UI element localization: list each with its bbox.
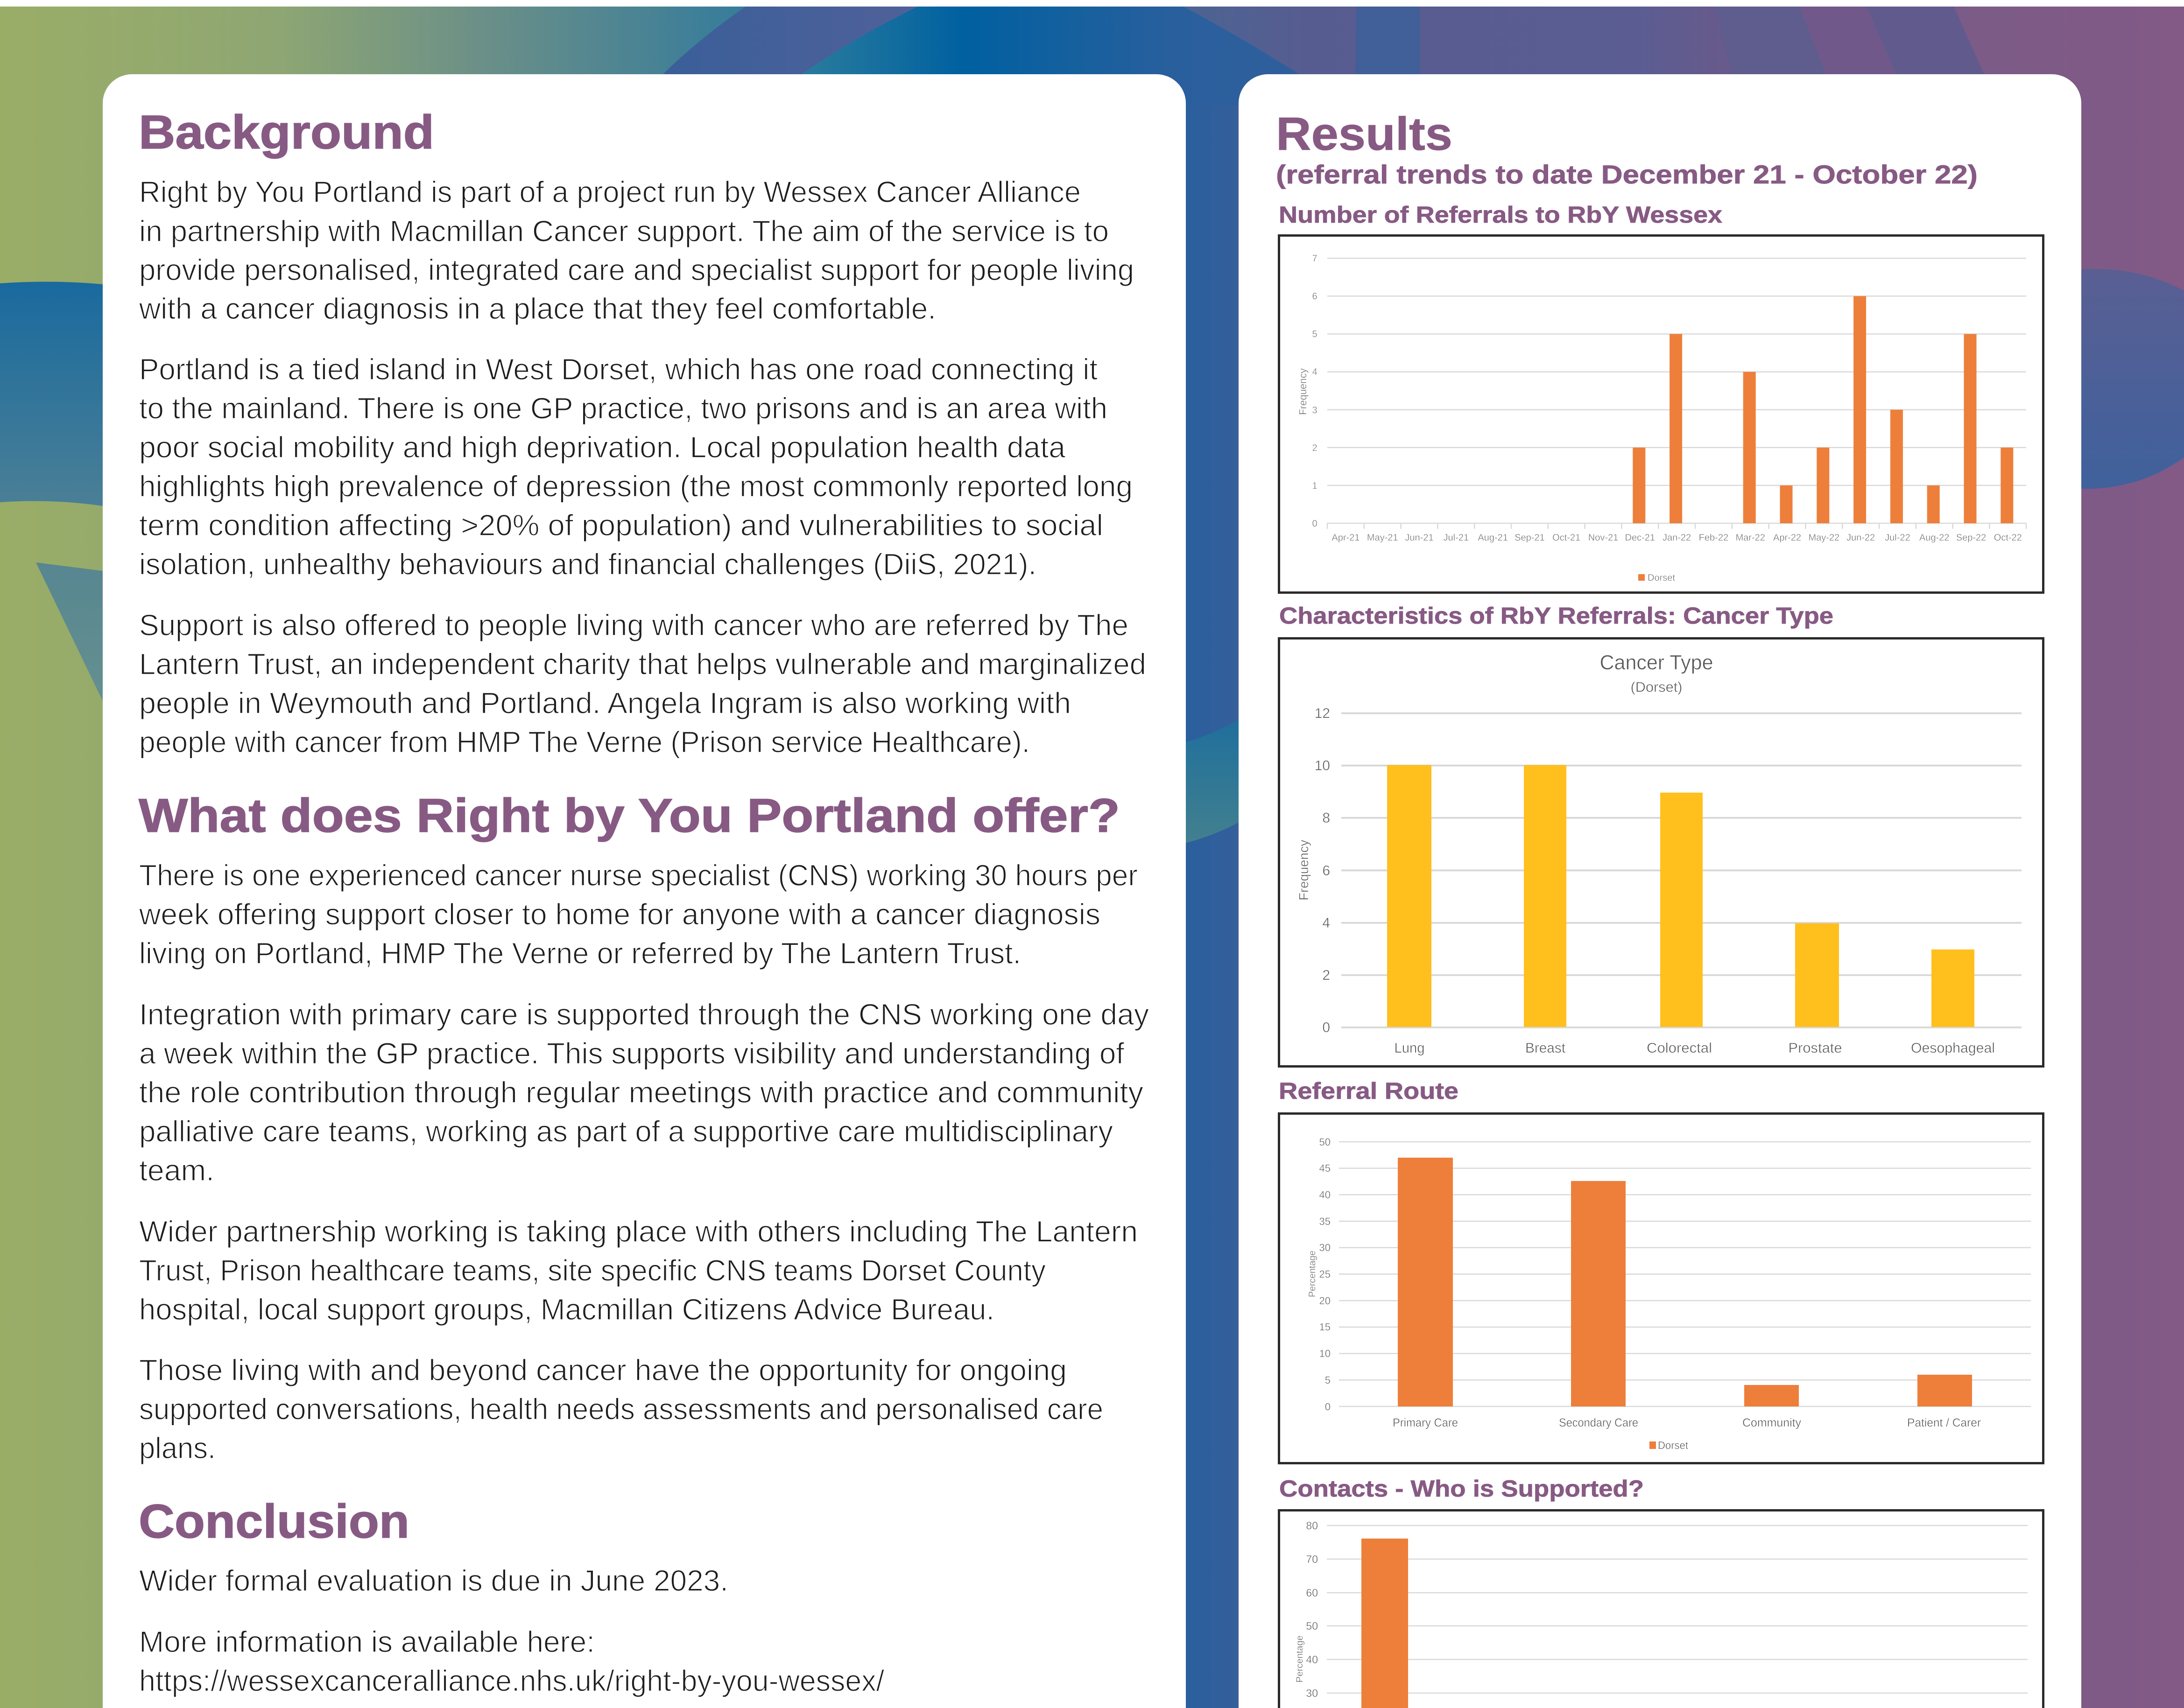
heading: Conclusion: Conclusion: [139, 1495, 409, 1548]
chart heading: contacts: Contacts - Who is Supported?: [1279, 1476, 1644, 1502]
bar chart: number of referrals: Aug-21: [1478, 533, 1508, 543]
bar chart: referral route: 35: [1319, 1216, 1331, 1227]
text block: background paragraph 2: term condition affecting >20% of population) and vulnerabilities to social: [139, 508, 1103, 542]
bar chart: cancer type: 0: [1322, 1020, 1330, 1035]
bar chart: contacts: 60: [1306, 1587, 1318, 1599]
text block: background paragraph 3: people with cancer from HMP The Verne (Prison service Healthcare).: [139, 725, 1030, 759]
text block: offer paragraph 2: Integration with primary care is supported through the CNS working one day: [139, 998, 1149, 1031]
text block: offer paragraph 2: the role contribution through regular meetings with practice and community: [139, 1075, 1143, 1109]
bar chart: number of referrals: 3: [1312, 405, 1317, 415]
bar chart: cancer type: (Dorset): [1630, 680, 1683, 695]
bar chart: cancer type: Frequency: [1296, 840, 1311, 900]
bar chart: number of referrals: 0: [1312, 519, 1317, 529]
text block: background paragraph 1: with a cancer diagnosis in a place that they feel comfortable.: [139, 292, 936, 325]
bar chart: cancer type: Lung: [1394, 1040, 1425, 1056]
panel: left text column: [103, 74, 1186, 1708]
text block: background paragraph 3: people in Weymouth and Portland. Angela Ingram is also working with: [139, 686, 1071, 720]
bar chart: referral route: Dorset: [1658, 1439, 1689, 1451]
text block: conclusion: More information is available here:: [139, 1625, 595, 1659]
bar chart: number of referrals: Apr-22: [1773, 533, 1801, 543]
text block: offer paragraph 3: hospital, local support groups, Macmillan Citizens Advice Bureau.: [139, 1293, 994, 1326]
text block: offer paragraph 1: [139, 858, 1138, 970]
bar chart: referral route: Secondary Care: [1559, 1416, 1638, 1429]
bar chart: contacts: 40: [1306, 1653, 1318, 1666]
bar chart: number of referrals: Jun-22: [1846, 533, 1875, 543]
bar chart: number of referrals: Mar-22: [1736, 533, 1765, 543]
bar chart: number of referrals: Oct-22: [1994, 533, 2022, 543]
bar chart: cancer type: Colorectal: [1647, 1040, 1712, 1056]
bar chart: number of referrals: 2: [1312, 443, 1317, 453]
text block: offer paragraph 4: supported conversations, health needs assessments and personalised care: [139, 1392, 1103, 1426]
bar chart: cancer type: Cancer Type: [1599, 651, 1713, 674]
bar chart: contacts: [1279, 1511, 2043, 1708]
bar chart: referral route: 25: [1319, 1268, 1331, 1280]
chart heading: cancer type: Characteristics of RbY Referrals: Cancer Type: [1279, 603, 1833, 629]
bar chart: cancer type: 8: [1322, 810, 1330, 826]
text block: offer paragraph 3: [139, 1215, 1138, 1326]
text block: conclusion: https://wessexcanceralliance.nhs.uk/right-by-you-wessex/: [139, 1664, 884, 1697]
bar chart: number of referrals: 4: [1312, 367, 1317, 377]
bar chart: referral route: Community: [1742, 1416, 1801, 1429]
text block: background paragraph 1: [139, 175, 1134, 325]
heading: Results: Results: [1276, 108, 1452, 160]
bar chart: number of referrals: Jun-21: [1405, 533, 1434, 543]
bar chart: number of referrals: Oct-21: [1552, 533, 1580, 543]
bar chart: referral route: 5: [1325, 1374, 1331, 1386]
chart heading: number of referrals: Number of Referrals to RbY Wessex: [1279, 202, 1722, 228]
bar chart: contacts: 30: [1306, 1687, 1318, 1699]
bar chart: referral route: 50: [1319, 1136, 1331, 1148]
text block: offer paragraph 2: [139, 998, 1149, 1187]
text block: conclusion: [139, 1564, 884, 1697]
bar chart: number of referrals: 7: [1312, 253, 1317, 264]
text block: background paragraph 3: [139, 608, 1146, 759]
bar chart: number of referrals: Jul-22: [1885, 533, 1910, 543]
bar chart: cancer type: 12: [1315, 706, 1330, 721]
bar chart: cancer type: Breast: [1525, 1040, 1566, 1056]
text block: background paragraph 2: isolation, unhealthy behaviours and financial challenges (DiiS, 2021).: [139, 547, 1036, 581]
bar chart: number of referrals: 6: [1312, 291, 1317, 302]
text block: background paragraph 2: to the mainland. There is one GP practice, two prisons and is an area with: [139, 391, 1107, 425]
bar chart: referral route: 0: [1325, 1401, 1331, 1413]
text block: background paragraph 1: provide personalised, integrated care and specialist support for people living: [139, 253, 1134, 287]
text block: background paragraph 1: in partnership with Macmillan Cancer support. The aim of the service is to: [139, 214, 1109, 248]
text block: offer paragraph 2: a week within the GP practice. This supports visibility and understanding of: [139, 1036, 1124, 1070]
chart heading: referral route: Referral Route: [1279, 1078, 1458, 1104]
text block: offer paragraph 3: Trust, Prison healthcare teams, site specific CNS teams Dorset County: [139, 1254, 1046, 1287]
bar chart: number of referrals: May-21: [1367, 533, 1398, 543]
bar chart: referral route: Percentage: [1307, 1251, 1317, 1297]
bar chart: number of referrals: Nov-21: [1588, 533, 1618, 543]
bar chart: number of referrals: Apr-21: [1332, 533, 1360, 543]
text block: offer paragraph 3: Wider partnership working is taking place with others including The Lantern: [139, 1215, 1138, 1248]
text block: background paragraph 2: Portland is a tied island in West Dorset, which has one road connecting it: [139, 352, 1098, 386]
panel: results column: [1239, 74, 2081, 1708]
bar chart: number of referrals: [1279, 235, 2043, 593]
text block: offer paragraph 1: week offering support closer to home for anyone with a cancer diagnosis: [139, 897, 1100, 931]
text block: background paragraph 1: Right by You Portland is part of a project run by Wessex Cancer Alliance: [139, 175, 1081, 209]
bar chart: contacts: Percentage: [1295, 1636, 1305, 1682]
bar chart: number of referrals: 1: [1312, 481, 1317, 491]
bar chart: cancer type: 6: [1322, 863, 1330, 879]
bar chart: referral route: 10: [1319, 1348, 1331, 1359]
bar chart: cancer type: Oesophageal: [1911, 1040, 1995, 1056]
bar chart: number of referrals: Dec-21: [1625, 533, 1655, 543]
text block: offer paragraph 1: There is one experienced cancer nurse specialist (CNS) working 30 hours per: [139, 858, 1138, 892]
heading: What does Right by You Portland offer?: What does Right by You Portland offer?: [139, 789, 1120, 842]
heading: Background: Background: [139, 105, 434, 159]
bar chart: cancer type: Prostate: [1788, 1040, 1842, 1056]
text block: conclusion: Wider formal evaluation is due in June 2023.: [139, 1564, 728, 1597]
bar chart: contacts: 80: [1306, 1519, 1318, 1532]
bar chart: cancer type: 2: [1322, 968, 1330, 983]
text block: offer paragraph 4: [139, 1353, 1103, 1465]
bar chart: referral route: 45: [1319, 1162, 1331, 1174]
bar chart: contacts: 50: [1306, 1620, 1318, 1632]
bar chart: number of referrals: Sep-22: [1956, 533, 1986, 543]
subheading: referral trends: (referral trends to date December 21 - October 22): [1276, 160, 1978, 189]
bar chart: cancer type: 4: [1322, 915, 1330, 931]
bar chart: number of referrals: May-22: [1808, 533, 1839, 543]
text block: background paragraph 3: Lantern Trust, an independent charity that helps vulnerable and marginalized: [139, 647, 1146, 681]
bar chart: contacts: 70: [1306, 1553, 1318, 1565]
text block: offer paragraph 4: Those living with and beyond cancer have the opportunity for ongoing: [139, 1353, 1067, 1387]
bar chart: cancer type: 10: [1315, 758, 1330, 773]
bar chart: referral route: 40: [1319, 1189, 1331, 1201]
bar chart: referral route: Primary Care: [1393, 1416, 1458, 1429]
bar chart: number of referrals: Frequency: [1297, 368, 1309, 415]
text block: offer paragraph 2: team.: [139, 1153, 214, 1187]
bar chart: number of referrals: Aug-22: [1919, 533, 1949, 543]
text block: background paragraph 2: highlights high prevalence of depression (the most commonly reported long: [139, 470, 1133, 503]
bar chart: referral route: 20: [1319, 1295, 1331, 1307]
bar chart: number of referrals: Jan-22: [1663, 533, 1691, 543]
bar chart: number of referrals: Jul-21: [1444, 533, 1469, 543]
text block: background paragraph 2: poor social mobility and high deprivation. Local population health data: [139, 430, 1065, 464]
bar chart: referral route: [1279, 1114, 2043, 1463]
text block: background paragraph 2: [139, 352, 1133, 581]
bar chart: number of referrals: Dorset: [1648, 573, 1675, 583]
bar chart: referral route: 30: [1319, 1242, 1331, 1253]
bar chart: number of referrals: Feb-22: [1699, 533, 1728, 543]
text block: offer paragraph 1: living on Portland, HMP The Verne or referred by The Lantern Trust.: [139, 936, 1021, 970]
bar chart: referral route: 15: [1319, 1321, 1331, 1333]
text block: offer paragraph 2: palliative care teams, working as part of a supportive care multidisciplinary: [139, 1115, 1113, 1148]
bar chart: referral route: Patient / Carer: [1907, 1416, 1981, 1429]
bar chart: number of referrals: Sep-21: [1515, 533, 1545, 543]
text block: background paragraph 3: Support is also offered to people living with cancer who are referred by The: [139, 608, 1128, 642]
bar chart: number of referrals: 5: [1312, 329, 1317, 339]
bar chart: cancer type: [1279, 639, 2043, 1066]
text block: offer paragraph 4: plans.: [139, 1431, 216, 1465]
